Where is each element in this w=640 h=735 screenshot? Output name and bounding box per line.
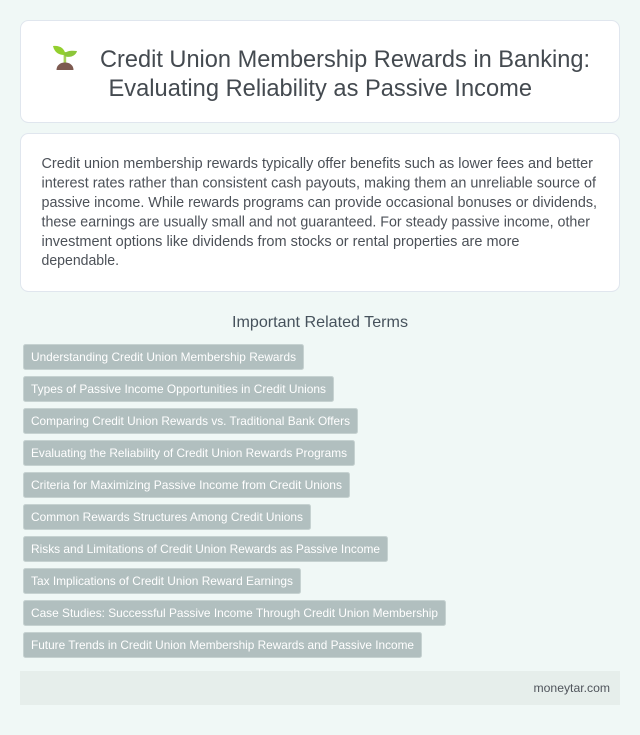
panel: summary paragraph [20, 134, 620, 292]
tag 10 [24, 632, 422, 658]
tag 5 [24, 472, 350, 498]
tag 3: Comparing Credit Union Rewards vs. Traditional Bank Offers [31, 414, 350, 428]
tag 1: Understanding Credit Union Membership Rewards [31, 350, 296, 364]
paragraph text: these earnings are usually small and not guaranteed. For steady passive income, other [42, 214, 590, 230]
icon: seedling [53, 46, 77, 70]
tag 10: Future Trends in Credit Union Membership Rewards and Passive Income [31, 638, 414, 652]
tag 4 [24, 440, 354, 466]
tag 8: Tax Implications of Credit Union Reward Earnings [31, 574, 293, 588]
paragraph text: dependable. [42, 253, 119, 269]
tag 9 [24, 600, 446, 626]
tag list [24, 344, 446, 658]
footer source text: moneytar.com [534, 681, 610, 695]
title text: Evaluating Reliability as Passive Income [108, 75, 532, 102]
panel: title card [20, 20, 620, 122]
paragraph text: Credit union membership rewards typically offer benefits such as lower fees and better [42, 156, 593, 172]
tag 4: Evaluating the Reliability of Credit Union Rewards Programs [31, 446, 347, 460]
tag 6: Common Rewards Structures Among Credit Unions [31, 510, 303, 524]
tag 8 [24, 568, 300, 594]
tag 1 [24, 344, 304, 370]
tag 7 [24, 536, 388, 562]
tag 7: Risks and Limitations of Credit Union Rewards as Passive Income [31, 542, 380, 556]
tag 3 [24, 408, 358, 434]
paragraph text: interest rates rather than consistent cash payouts, making them an unreliable source of [42, 176, 597, 192]
paragraph text: investment options like dividends from stocks or rental properties are more [42, 234, 520, 250]
footer [20, 671, 620, 705]
tag 2: Types of Passive Income Opportunities in Credit Unions [31, 382, 326, 396]
title text [100, 46, 590, 102]
tag 2 [24, 376, 334, 402]
heading: important related terms: Important Related Terms [232, 314, 408, 331]
title text: Credit Union Membership Rewards in Banking: [100, 46, 590, 73]
tag 5: Criteria for Maximizing Passive Income from Credit Unions [31, 478, 342, 492]
paragraph text [42, 156, 597, 269]
tag 9: Case Studies: Successful Passive Income Through Credit Union Membership [31, 606, 438, 620]
tag 6 [24, 504, 310, 530]
paragraph text: passive income. While rewards programs can provide occasional bonuses or dividends, [42, 195, 597, 211]
